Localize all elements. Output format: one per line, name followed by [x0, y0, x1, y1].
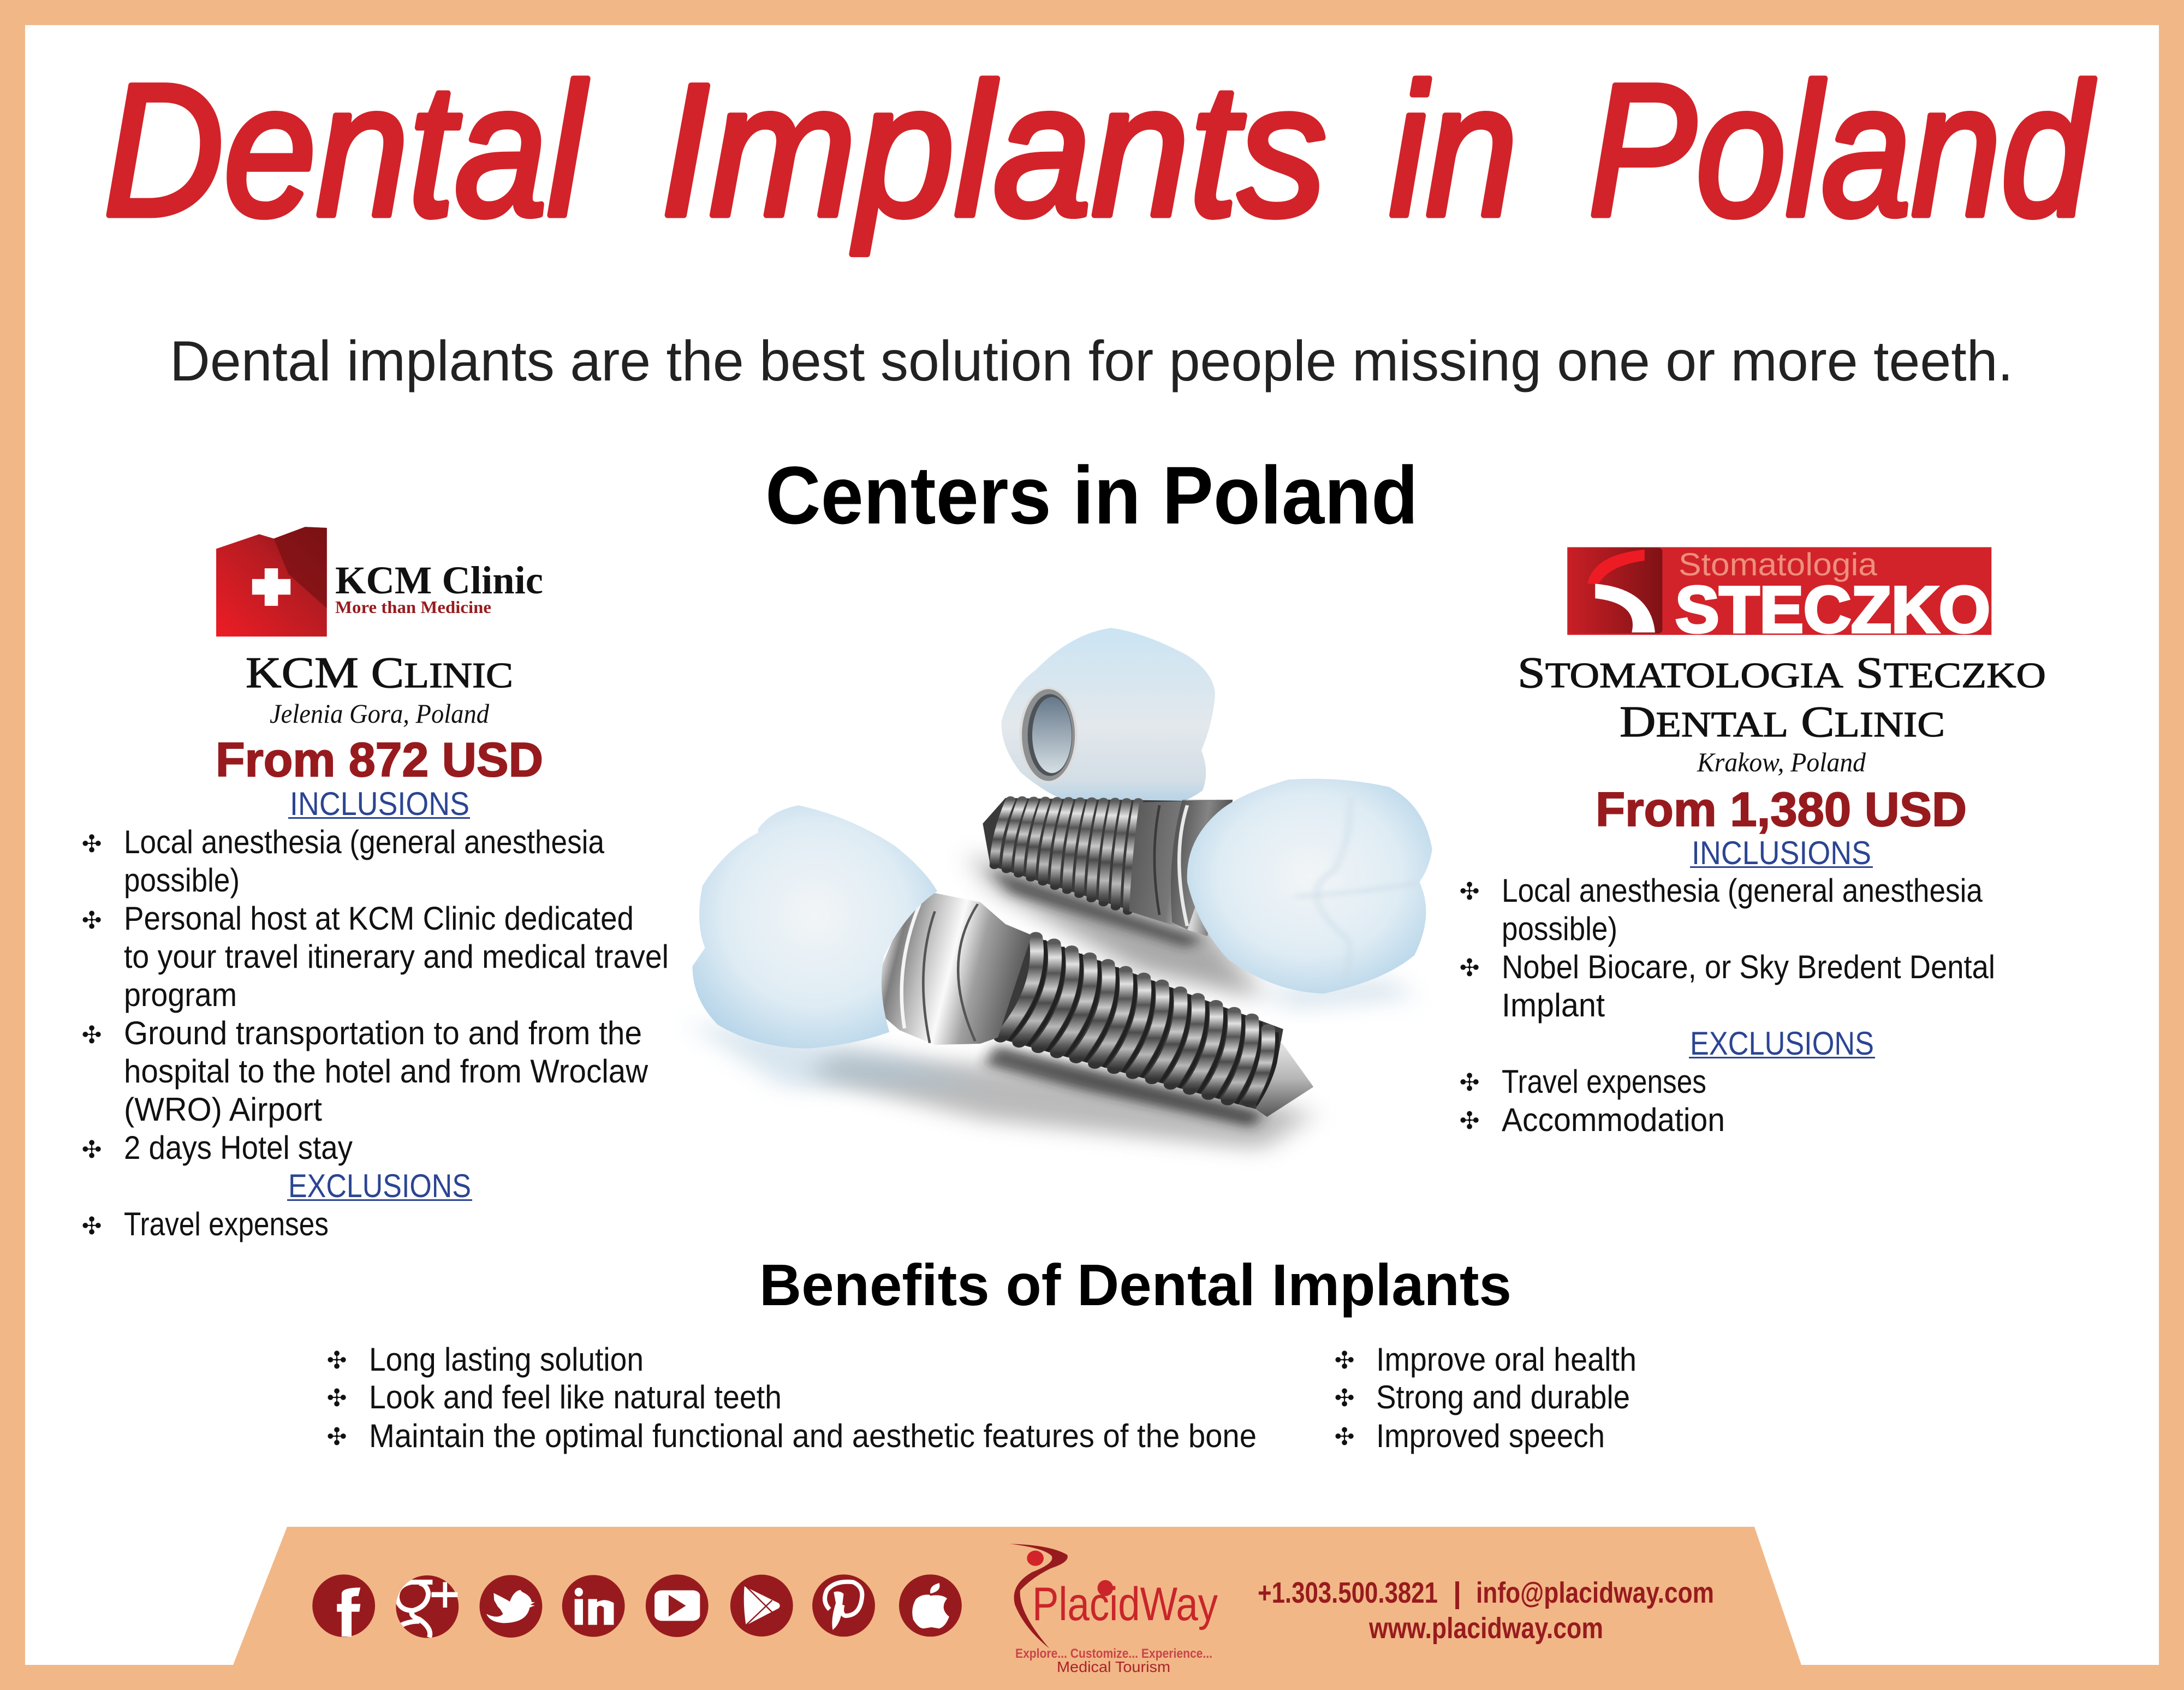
inclusions list: 2 days Hotel stay — [124, 1129, 353, 1166]
inclusions list: to your travel itinerary and medical travel — [124, 938, 669, 975]
inclusions list: hospital to the hotel and from Wroclaw — [124, 1053, 648, 1090]
inclusions list: ✣ — [1460, 954, 1479, 982]
icon: facebook — [312, 1574, 375, 1637]
inclusions list: ✣ — [82, 907, 102, 935]
benefits list: right column: Improve oral health — [1376, 1341, 1636, 1378]
inclusions heading: INCLUSIONS — [1692, 835, 1871, 871]
inclusions heading: INCLUSIONS — [290, 786, 469, 822]
heading: Centers in Poland: Centers in Poland — [765, 449, 1418, 541]
icon: pinterest — [812, 1574, 875, 1637]
illustration: dental implants — [687, 628, 1432, 1149]
rear implant crown — [1187, 779, 1432, 993]
contact details: www.placidway.com — [1368, 1612, 1603, 1645]
footer band — [233, 1527, 1801, 1675]
logo: KCM Clinic: KCM Clinic — [335, 558, 543, 602]
front implant screw — [880, 893, 1313, 1117]
contact details — [1258, 1576, 1714, 1645]
rear implant screw — [983, 798, 1233, 936]
logo: Stomatologia Steczko: STECZKO — [1675, 573, 1990, 646]
icon: apple — [899, 1574, 962, 1637]
inclusions list: Local anesthesia (general anesthesia — [124, 824, 605, 860]
logo: Stomatologia Steczko: Stomatologia — [1679, 547, 1878, 582]
clinic name — [1518, 649, 2046, 746]
shadows — [687, 853, 1414, 1149]
screw tip — [1255, 1041, 1313, 1117]
clinic location: Jelenia Gora, Poland — [270, 698, 490, 729]
exclusions list — [1460, 1063, 1725, 1138]
exclusions heading: EXCLUSIONS — [288, 1168, 471, 1204]
subtitle: Dental implants are the best solution for people missing one or more teeth. — [170, 330, 2013, 393]
inclusions list: ✣ — [82, 830, 102, 858]
title: in — [1389, 45, 1518, 255]
benefits list: left column: Look and feel like natural teeth — [369, 1379, 782, 1415]
title: Dental — [104, 45, 588, 255]
title: Poland — [1588, 45, 2097, 255]
logo: KCM Clinic: More than Medicine — [335, 597, 491, 617]
inclusions list: Nobel Biocare, or Sky Bredent Dental — [1502, 949, 1995, 985]
social icons — [312, 1574, 962, 1638]
exclusions list: Accommodation — [1502, 1102, 1725, 1138]
title — [104, 45, 2097, 256]
inclusions list: ✣ — [82, 1021, 102, 1049]
inclusions list: Local anesthesia (general anesthesia — [1502, 872, 1983, 909]
front implant crown — [692, 805, 937, 1049]
benefits list: right column: ✣ — [1335, 1347, 1354, 1374]
logo: KCM Clinic — [216, 527, 543, 636]
benefits list: right column: Improved speech — [1376, 1418, 1605, 1454]
price: From 872 USD — [216, 733, 543, 787]
icon: twitter — [480, 1575, 542, 1638]
heading: Benefits of Dental Implants: Benefits of Dental Implants — [759, 1252, 1511, 1318]
inclusions list: possible) — [124, 862, 240, 898]
contact details: +1.303.500.3821 — [1258, 1576, 1438, 1609]
clinic name: KCM C LINIC — [246, 649, 513, 697]
icon: youtube — [646, 1574, 709, 1637]
logo: PlacidWay: Explore... Customize... Experience... — [1015, 1646, 1212, 1661]
inclusions list: ✣ — [1460, 878, 1479, 906]
icon: play store — [730, 1575, 793, 1637]
icon: linkedin — [562, 1575, 625, 1637]
contact details: | — [1453, 1576, 1461, 1610]
inclusions list: program — [124, 977, 237, 1013]
benefits list: left column: ✣ — [327, 1347, 347, 1374]
panel: KCM Clinic — [82, 527, 669, 1242]
benefits list: left column: ✣ — [327, 1384, 347, 1412]
clinic name: DENTAL CLINIC — [1620, 698, 1945, 746]
title: Implants — [660, 45, 1326, 256]
benefits list: right column — [1335, 1341, 1636, 1454]
inclusions list: possible) — [1502, 911, 1617, 947]
clinic name: STOMATOLOGIA STECZKO — [1518, 649, 2046, 697]
icon: google plus — [396, 1575, 459, 1638]
loose crown — [1002, 628, 1215, 807]
exclusions list: ✣ — [1460, 1069, 1479, 1097]
inclusions list: Implant — [1502, 987, 1605, 1023]
benefits list: left column: Maintain the optimal functional and aesthetic features of the bone — [369, 1418, 1257, 1454]
logo: Stomatologia Steczko — [1567, 547, 1991, 646]
logo: PlacidWay: Medical Tourism — [1057, 1658, 1170, 1675]
inclusions list — [82, 824, 669, 1166]
exclusions list: Travel expenses — [124, 1206, 329, 1242]
benefits list: left column: ✣ — [327, 1423, 347, 1451]
benefits list: right column: Strong and durable — [1376, 1379, 1630, 1415]
benefits list: left column — [327, 1341, 1257, 1454]
contact details: info@placidway.com — [1476, 1576, 1714, 1609]
inclusions list: Personal host at KCM Clinic dedicated — [124, 900, 634, 937]
clinic location: Krakow, Poland — [1697, 747, 1866, 777]
inclusions list: Ground transportation to and from the — [124, 1015, 642, 1051]
panel: Stomatologia Steczko — [1460, 547, 2046, 1138]
exclusions list: ✣ — [1460, 1107, 1479, 1135]
exclusions list: ✣ — [82, 1212, 102, 1240]
price: From 1,380 USD — [1596, 782, 1967, 836]
exclusions list: Travel expenses — [1502, 1063, 1706, 1100]
inclusions list — [1460, 872, 1995, 1023]
inclusions list: (WRO) Airport — [124, 1091, 322, 1128]
logo: PlacidWay — [1010, 1544, 1218, 1675]
exclusions heading: EXCLUSIONS — [1690, 1025, 1874, 1062]
logo: PlacidWay: PlacidWay — [1032, 1578, 1218, 1631]
inclusions list: ✣ — [82, 1136, 102, 1164]
benefits list: right column: ✣ — [1335, 1423, 1354, 1451]
benefits list: right column: ✣ — [1335, 1384, 1354, 1412]
benefits list: left column: Long lasting solution — [369, 1341, 644, 1378]
